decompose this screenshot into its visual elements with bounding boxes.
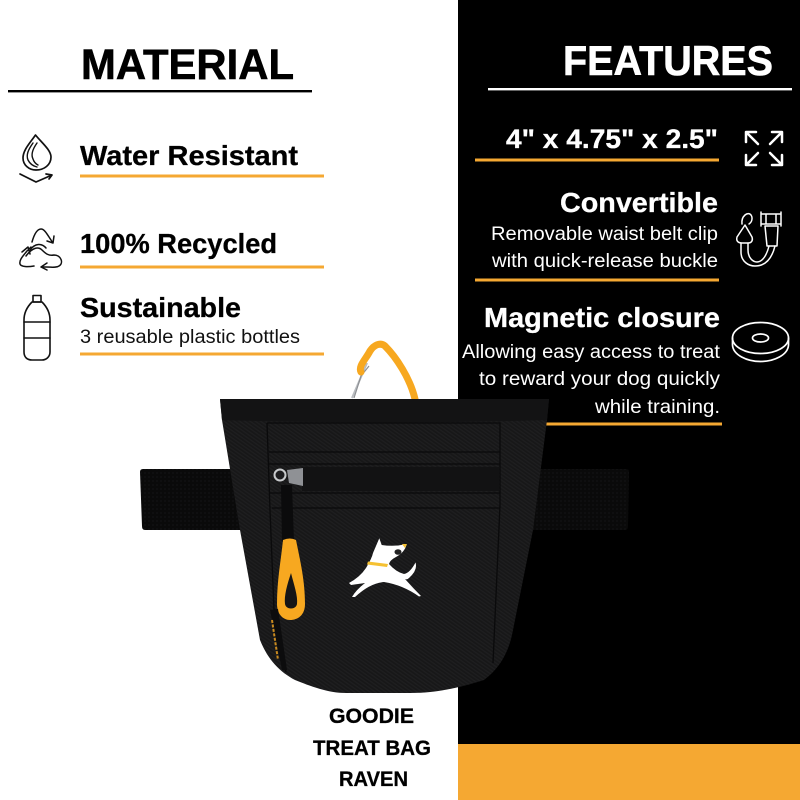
belt strap left [140,469,240,530]
caption: product name: TREAT BAG [313,737,431,760]
caption: product name [313,705,431,791]
text: reusable bottles: 3 reusable plastic bottles [80,327,300,348]
item: convertible: Convertible [560,187,718,218]
icon: belt clip [737,212,781,266]
icon: bottle [24,296,50,360]
text: convertible description: with quick-release buckle [491,251,718,272]
text: magnetic description: to reward your dog quickly [479,369,721,390]
carabiner [352,344,415,399]
panel: features [462,37,792,426]
zipper pull [274,468,305,620]
product: treat bag [140,344,629,693]
logo: dog [349,538,421,597]
heading: features: FEATURES [563,37,773,84]
text: convertible description [491,224,718,272]
belt strap right [530,469,629,530]
bag rim [220,399,549,422]
item: sustainable: Sustainable [80,292,241,323]
text: magnetic description [462,342,721,418]
item: 100% recycled: 100% Recycled [80,228,277,259]
text: magnetic description: Allowing easy access to treat [462,342,721,363]
icon: recycling [20,229,61,270]
brand tab [270,609,287,670]
panel: features background [458,0,800,744]
caption: product name: RAVEN [339,768,408,791]
heading: material: MATERIAL [81,41,294,89]
icon: expand arrows [746,132,782,165]
icon: magnet disk [732,322,788,362]
text: magnetic description: while training. [594,397,720,418]
item: dimensions: 4" x 4.75" x 2.5" [506,124,718,154]
zipper tape [302,467,499,491]
caption: product name: GOODIE [329,705,414,728]
footer: orange band [458,744,800,800]
bag body [220,399,549,693]
item: magnetic closure: Magnetic closure [484,302,720,333]
pocket seams [267,423,500,672]
item: water resistant: Water Resistant [80,140,298,171]
icon: water drop [20,135,52,182]
panel: material [8,41,324,360]
text: convertible description: Removable waist belt clip [491,224,718,245]
